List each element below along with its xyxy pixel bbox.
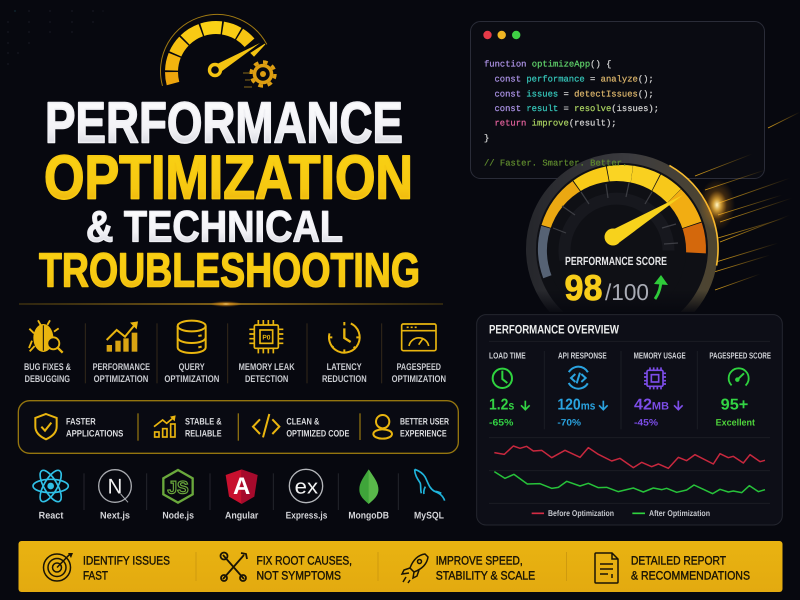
tech: Express.js [286, 469, 327, 521]
benefit: faster applications: APPLICATIONS [66, 428, 123, 439]
code text: function optimizeApp() { [484, 60, 611, 70]
metric: pagespeed score [709, 350, 771, 427]
code text: const performance = analyze(); [494, 74, 654, 84]
gauge colored segments [538, 165, 706, 278]
title: & TECHNICAL [86, 202, 343, 252]
banner: fix root causes: NOT SYMPTOMS [256, 568, 341, 582]
title: TROUBLESHOOTING [39, 244, 420, 298]
title [39, 90, 420, 298]
banner: detailed report: DETAILED REPORT [631, 554, 727, 568]
chart legend: Before Optimization [548, 509, 614, 518]
banner: identify issues: IDENTIFY ISSUES [83, 554, 170, 568]
metric: api response: -70% [557, 417, 581, 427]
title: PERFORMANCE [45, 90, 403, 156]
benefit: better user experience [373, 415, 449, 439]
code text: } [484, 134, 489, 144]
banner: identify issues: FAST [83, 568, 109, 582]
overview heading: PERFORMANCE OVERVIEW [489, 323, 619, 336]
service: pagespeed optimization: OPTIMIZATION [392, 374, 446, 384]
benefit: better user experience: BETTER USER [400, 416, 449, 426]
tech: Express.js: ex [295, 475, 318, 498]
code text: const issues = detectIssues(); [494, 89, 654, 99]
tech: Next.js: Next.js [100, 510, 130, 521]
service: memory leak detection: P0 [262, 334, 270, 341]
code text [484, 60, 659, 144]
metric: api response: 120ms [557, 395, 595, 413]
code text: const result = resolve(issues); [494, 104, 659, 114]
benefit: stable and reliable [154, 415, 222, 439]
service: bug fixes: BUG FIXES & [24, 362, 71, 372]
chart legend: After Optimization [649, 509, 710, 518]
service: query optimization [164, 321, 219, 384]
gauge hot rim [669, 164, 719, 266]
banner: identify issues [44, 553, 170, 582]
benefit: clean code [253, 414, 349, 439]
service: query optimization: OPTIMIZATION [164, 374, 219, 384]
window controls [483, 31, 520, 39]
line chart: before vs after [494, 446, 765, 494]
metric: api response [557, 350, 608, 427]
service: latency reduction [322, 317, 367, 384]
metric: load time: LOAD TIME [489, 350, 526, 360]
benefit: clean code: CLEAN & [286, 416, 319, 426]
benefit: faster applications: FASTER [66, 416, 96, 426]
chart legend [532, 509, 710, 518]
service: performance optimization [93, 321, 150, 384]
banner: improve speed: IMPROVE SPEED, [436, 554, 523, 568]
tech: Angular: A [233, 473, 250, 499]
benefit: faster applications [35, 414, 123, 439]
metric: pagespeed score: Excellent [716, 417, 755, 427]
tech: Node.js: JS [167, 478, 189, 498]
gauge score readout: 98 [564, 267, 602, 308]
service: memory leak detection: MEMORY LEAK [239, 362, 295, 372]
code text: return improve(result); [494, 119, 617, 129]
metric: memory usage: 42MB [634, 395, 669, 413]
metric: api response: API RESPONSE [558, 350, 607, 360]
tech: Angular: Angular [225, 510, 258, 521]
gauge glow [700, 181, 734, 229]
panel: performance score gauge [526, 153, 734, 311]
tech: React: React [39, 510, 63, 521]
panel: code window [470, 22, 764, 178]
tech stack row [33, 467, 445, 521]
icon: title speedometer [112, 2, 286, 140]
tech: Angular [225, 469, 258, 521]
benefits band [18, 401, 458, 453]
service: pagespeed optimization [392, 324, 446, 384]
title: OPTIMIZATION [44, 144, 413, 212]
banner: improve speed: STABILITY & SCALE [436, 568, 535, 582]
metric: load time [489, 350, 530, 427]
tech: MySQL: MySQL [414, 510, 444, 521]
banner: fix root causes: FIX ROOT CAUSES, [256, 554, 352, 568]
metric: memory usage [634, 350, 686, 427]
service: performance optimization: PERFORMANCE [93, 362, 150, 372]
decorative dot grid [7, 10, 104, 65]
tech: MongoDB: MongoDB [348, 510, 389, 521]
tech: MongoDB [348, 469, 389, 521]
service: performance optimization: OPTIMIZATION [94, 374, 148, 384]
service: query optimization: QUERY [179, 362, 205, 372]
tech: MySQL [414, 469, 445, 521]
benefit: better user experience: EXPERIENCE [400, 428, 447, 439]
gauge needle [604, 195, 683, 246]
panel: performance overview [477, 315, 782, 525]
code comment over gauge edge: // Faster. Smarter. Better. [484, 158, 627, 168]
service: pagespeed optimization: PAGESPEED [397, 362, 441, 372]
tech: Express.js: Express.js [286, 510, 327, 521]
service: memory leak detection: DETECTION [245, 374, 288, 384]
gauge score readout: PERFORMANCE SCORE [565, 254, 667, 268]
tech: Node.js [162, 470, 194, 521]
bottom banner [18, 541, 782, 592]
gauge ticks [552, 183, 678, 260]
light rays [695, 112, 800, 290]
metric: pagespeed score: PAGESPEED SCORE [709, 350, 771, 360]
metric: load time: 1.2s [489, 395, 514, 413]
benefit: stable and reliable: STABLE & [185, 416, 222, 426]
tech: Node.js: Node.js [162, 510, 194, 521]
metric: load time: -65% [489, 417, 513, 427]
tech: Next.js: N [108, 474, 122, 498]
metric: pagespeed score: 95+ [721, 395, 748, 413]
tech: Next.js [99, 470, 131, 521]
metric: memory usage: MEMORY USAGE [634, 350, 686, 360]
metric: memory usage: -45% [634, 417, 658, 427]
services row [18, 317, 458, 521]
gauge bottom fade [539, 293, 707, 312]
benefit: clean code: OPTIMIZED CODE [286, 428, 349, 439]
title divider rule [19, 301, 443, 307]
tech: React [33, 467, 68, 521]
banner: detailed report [595, 553, 750, 583]
banner: fix root causes [220, 552, 352, 582]
service: latency reduction: REDUCTION [322, 374, 367, 384]
gauge score readout: /100 [605, 279, 649, 305]
service: bug fixes [24, 320, 71, 384]
benefit: stable and reliable: RELIABLE [185, 428, 222, 439]
service: memory leak detection [239, 320, 295, 384]
banner: detailed report: & RECOMMENDATIONS [631, 568, 750, 582]
banner: improve speed [402, 554, 535, 583]
gauge score readout [564, 254, 668, 308]
gauge dial face [546, 181, 686, 276]
service: latency reduction: LATENCY [327, 362, 362, 372]
service: bug fixes: DEBUGGING [25, 374, 70, 384]
